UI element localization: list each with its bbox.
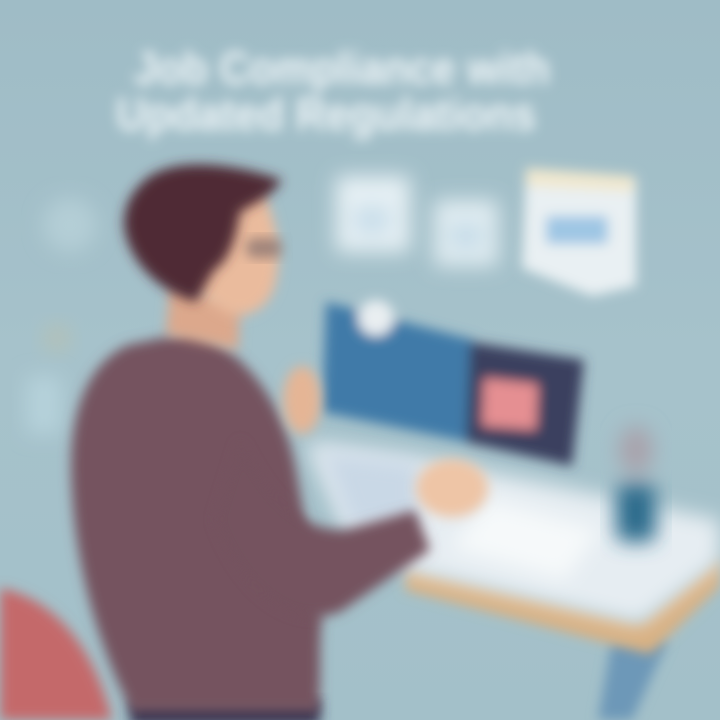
glasses xyxy=(246,238,282,258)
blue panel xyxy=(322,302,474,442)
hair xyxy=(124,164,282,302)
trousers xyxy=(130,700,320,720)
near hand xyxy=(416,459,488,517)
person xyxy=(71,164,488,720)
table xyxy=(306,442,720,720)
chair xyxy=(0,588,112,720)
table edge xyxy=(405,556,720,654)
floating card: large calendar xyxy=(522,168,636,296)
dark panel xyxy=(466,342,584,466)
title: Job Compliance with xyxy=(134,42,550,94)
laptop screen xyxy=(322,300,584,466)
far hand xyxy=(283,366,321,434)
icon: left faint circle xyxy=(43,198,97,252)
floating card: second xyxy=(434,200,498,266)
table top xyxy=(306,442,720,624)
arm xyxy=(215,440,430,616)
torso xyxy=(71,332,322,712)
icon: small yellow dot xyxy=(43,324,71,352)
red card on screen xyxy=(482,378,538,430)
table leg xyxy=(598,640,668,720)
floating card: first xyxy=(336,176,410,252)
neck xyxy=(166,285,240,350)
keyboard area xyxy=(320,450,420,530)
white badge xyxy=(358,300,394,336)
title xyxy=(116,42,550,140)
title: Updated Regulations xyxy=(116,88,536,140)
face xyxy=(185,190,278,315)
glass xyxy=(616,426,656,542)
icon: left faint document xyxy=(26,376,62,434)
paper on table xyxy=(450,500,600,580)
